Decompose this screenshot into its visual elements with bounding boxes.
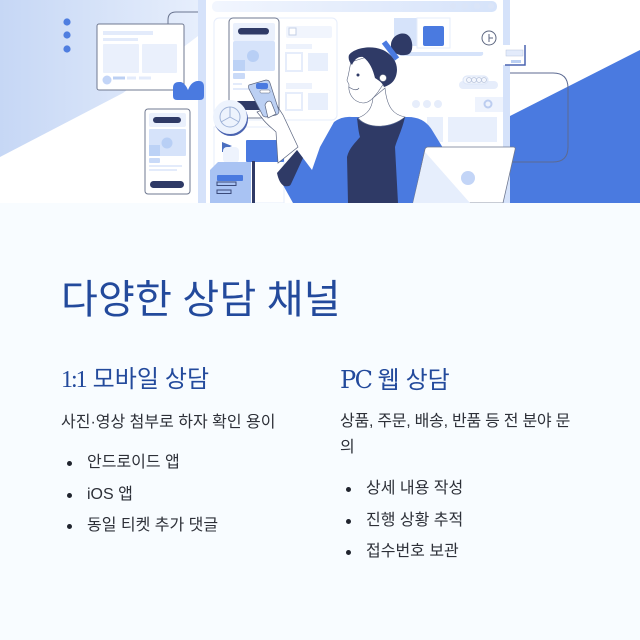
wireframe card xyxy=(97,24,184,90)
column: mobile consultation xyxy=(61,367,275,534)
description: mobile: 사진·영상 첨부로 하자 확인 용이 xyxy=(61,414,275,431)
cardigan xyxy=(283,117,443,203)
bullet list: PC web xyxy=(346,480,463,560)
bullet list: mobile: iOS 앱 xyxy=(87,486,133,502)
browser window xyxy=(198,0,510,203)
bullet list: PC web: 접수번호 보관 xyxy=(366,543,459,560)
face xyxy=(347,56,386,103)
laptop xyxy=(413,147,515,203)
background blue triangle xyxy=(510,50,640,203)
bullet list: mobile xyxy=(67,454,218,534)
hero illustration xyxy=(0,0,640,203)
column: PC web consultation xyxy=(340,366,570,560)
background light blue triangle xyxy=(0,0,198,157)
flag and tag xyxy=(222,142,232,152)
shirt xyxy=(347,117,405,203)
heading: PC web: PC 웹 상담 xyxy=(340,366,450,394)
clock icon xyxy=(482,31,496,45)
person xyxy=(277,33,443,203)
bullet list: mobile: 안드로이드 앱 xyxy=(87,454,180,471)
hair bun xyxy=(391,33,412,55)
description: PC web xyxy=(340,412,570,456)
dots xyxy=(63,18,71,53)
description: PC web: 의 xyxy=(340,439,354,456)
connector outline xyxy=(168,12,198,24)
icon: folder xyxy=(173,81,204,100)
dark sleeve xyxy=(277,150,303,186)
heading: mobile: 1:1 모바일 상담 xyxy=(61,367,209,393)
credit card xyxy=(503,45,525,65)
blue panel xyxy=(246,140,284,162)
bullet list: PC web: 진행 상황 추적 xyxy=(366,512,463,528)
chain badge xyxy=(463,76,488,84)
description: PC web: 상품, 주문, 배송, 반품 등 전 분야 문 xyxy=(340,413,570,430)
badge: pie icon xyxy=(213,100,248,136)
eye xyxy=(356,74,360,76)
phone wireframe small xyxy=(145,109,190,194)
title: 다양한 상담 채널 xyxy=(61,277,341,322)
phone wireframe large xyxy=(229,18,279,118)
neck xyxy=(358,88,405,126)
bullet list: PC web: 상세 내용 작성 xyxy=(366,480,463,497)
hair xyxy=(349,47,397,87)
hair band xyxy=(384,42,397,59)
rounded outline right xyxy=(510,73,568,162)
bullet list: mobile: 동일 티켓 추가 댓글 xyxy=(87,517,218,534)
earring xyxy=(380,74,386,82)
box xyxy=(210,162,251,203)
hand and phone xyxy=(248,80,298,163)
